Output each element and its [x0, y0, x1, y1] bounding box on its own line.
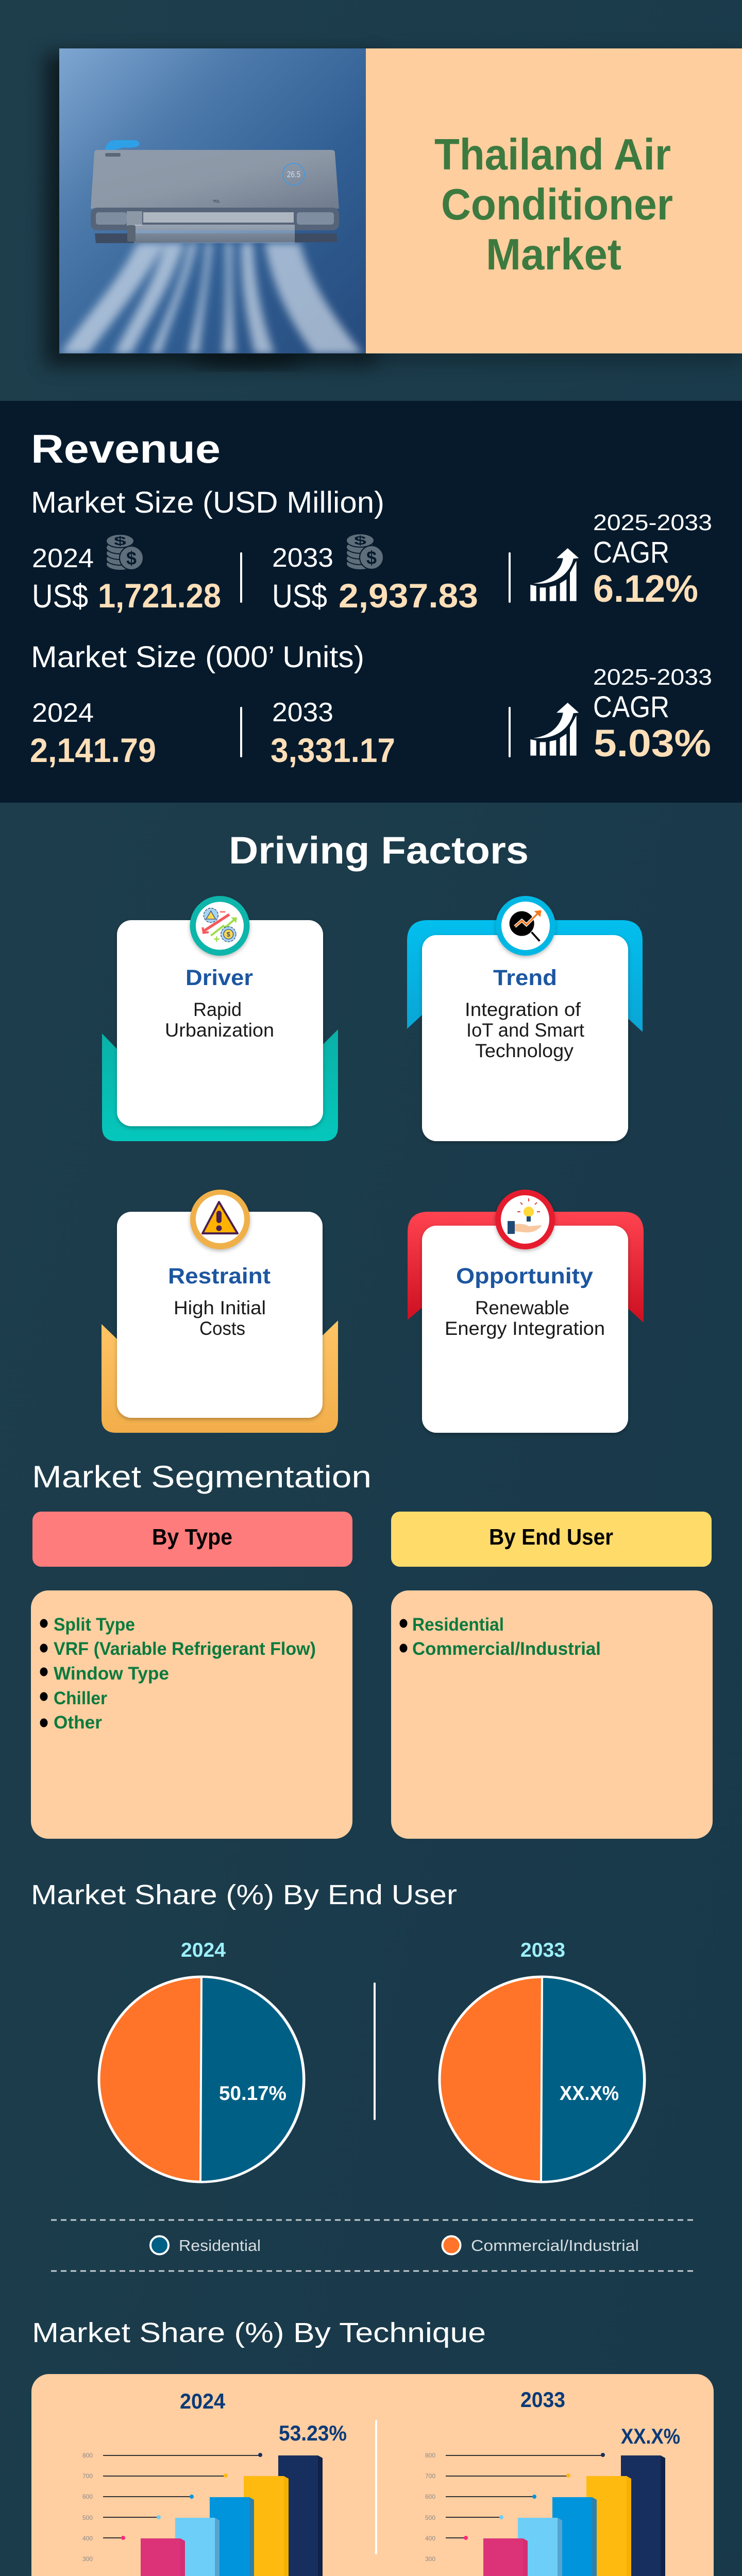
stat: 2024 value: 2024 — [32, 544, 94, 573]
heading: opportunity: Opportunity — [456, 1264, 593, 1289]
bar chart 2033: 700 — [425, 2472, 435, 2480]
panel: type list: Other — [54, 1713, 102, 1733]
stat: 2024 value: US$ — [32, 578, 88, 615]
stat: 2024 value — [32, 544, 221, 615]
title text — [435, 138, 672, 270]
bar chart 2024: 600 — [82, 2493, 93, 2500]
heading: driving factors: Driving Factors — [229, 829, 529, 872]
panel: end user list — [391, 1590, 713, 1839]
legend: end user: Residential — [179, 2236, 261, 2255]
heading: market share by technique: Market Share (%) By Technique — [32, 2317, 486, 2348]
bar chart 2033 — [425, 2452, 665, 2576]
header: by end user — [391, 1512, 712, 1567]
text: trend — [465, 999, 585, 1061]
text: market size USD: Market Size (USD Million) — [31, 486, 384, 519]
CAGR 2025-2033 units — [593, 665, 712, 765]
bar chart 2024 — [82, 2452, 323, 2576]
heading: driver: Driver — [185, 965, 253, 990]
panel: end user list: Commercial/Industrial — [412, 1639, 601, 1659]
CAGR 2025-2033 units: 5.03% — [594, 722, 711, 765]
text: trend: Technology — [475, 1040, 574, 1061]
stat: 2033 units: 2033 — [272, 698, 333, 727]
hero image: air conditioner — [59, 48, 366, 354]
title panel — [366, 48, 742, 353]
pie chart 2024: 50.17% — [219, 2082, 286, 2105]
text: market size units: Market Size (000’ Units) — [31, 640, 364, 674]
stat: 2024 units — [30, 698, 156, 769]
bar chart 2024: 800 — [82, 2452, 93, 2459]
legend: end user: Commercial/Industrial — [471, 2236, 639, 2255]
icon: coins 2033: $ — [354, 534, 367, 548]
icon: coins 2024: $ — [114, 534, 127, 548]
divider — [375, 2420, 377, 2554]
panel: revenue — [0, 401, 742, 803]
CAGR 2025-2033: CAGR — [593, 536, 669, 569]
panel: end user list: Residential — [412, 1615, 504, 1635]
year label 2033: 2033 — [520, 2387, 565, 2412]
value 2024: 53.23% — [279, 2421, 347, 2445]
icon: trend — [496, 896, 555, 956]
text: restraint — [174, 1297, 266, 1339]
bar chart 2033: 300 — [425, 2555, 435, 2563]
title text: Thailand Air — [434, 130, 671, 179]
text: driver — [165, 999, 274, 1041]
heading: trend: Trend — [493, 965, 557, 990]
CAGR 2025-2033 — [593, 510, 712, 610]
text: opportunity: Energy Integration — [445, 1318, 605, 1339]
pie chart 2024 — [99, 1977, 304, 2182]
heading: market segmentation: Market Segmentation — [32, 1460, 372, 1494]
year label 2024: 2024 — [180, 2389, 226, 2413]
hero image: air conditioner: TCL — [213, 200, 221, 204]
text: opportunity: Renewable — [475, 1297, 569, 1318]
heading: revenue: Revenue — [31, 426, 221, 471]
CAGR 2025-2033 units: 2025-2033 — [593, 665, 712, 690]
panel: type list: VRF (Variable Refrigerant Flow) — [54, 1639, 316, 1659]
icon: coins 2024 — [106, 534, 143, 570]
stat: 2024 value: 1,721.28 — [98, 577, 221, 615]
icon: driver: $ — [227, 931, 230, 938]
stat: 2024 units: 2024 — [32, 698, 94, 728]
panel: type list: Split Type — [54, 1615, 135, 1635]
CAGR 2025-2033: 2025-2033 — [593, 510, 712, 535]
pie chart 2033: XX.X% — [560, 2082, 619, 2105]
CAGR 2025-2033: 6.12% — [593, 567, 698, 610]
text: trend: IoT and Smart — [466, 1020, 585, 1041]
icon: opportunity — [495, 1190, 555, 1249]
stat: 2033 value — [272, 543, 478, 615]
legend: end user — [150, 2236, 639, 2255]
bar chart 2024: 500 — [82, 2514, 93, 2521]
title text: Conditioner — [441, 180, 673, 229]
year label 2024: 2024 — [181, 1939, 226, 1961]
bar chart 2033: 500 — [425, 2514, 435, 2521]
icon: restraint — [190, 1190, 250, 1249]
text: driver: Urbanization — [165, 1020, 274, 1041]
panel: opportunity — [408, 1190, 644, 1433]
hero banner — [45, 48, 742, 368]
text: opportunity — [445, 1297, 605, 1339]
icon: driver — [190, 896, 249, 956]
panel: restraint — [102, 1190, 338, 1433]
divider — [509, 552, 511, 603]
stat: 2033 value: 2033 — [272, 543, 333, 573]
hero image: air conditioner: 26.5 — [287, 170, 300, 179]
panel: technique charts — [31, 2374, 714, 2576]
title text: Market — [486, 230, 621, 279]
icon: coins 2033 — [346, 534, 383, 570]
heading: restraint: Restraint — [168, 1264, 271, 1289]
panel: type list: Chiller — [54, 1688, 107, 1708]
heading: market share by end user: Market Share (%) By End User — [31, 1879, 457, 1910]
bar chart 2033: 400 — [425, 2535, 435, 2542]
divider — [509, 707, 511, 757]
text: trend: Integration of — [465, 999, 581, 1020]
header: by end user: By End User — [489, 1524, 613, 1550]
icon: coins 2024: $ — [126, 548, 137, 569]
stat: 2033 value: US$ — [272, 578, 327, 615]
year label 2033: 2033 — [520, 1939, 565, 1961]
bar chart 2033: 800 — [425, 2452, 435, 2459]
stat: 2033 value: 2,937.83 — [339, 577, 478, 615]
divider — [240, 707, 242, 757]
icon: growth arrow — [530, 703, 579, 756]
pie chart 2033 — [440, 1977, 645, 2182]
bar chart 2033: 600 — [425, 2493, 435, 2500]
stat: 2033 units: 3,331.17 — [271, 731, 395, 769]
panel: type list — [31, 1590, 352, 1839]
text: driver: Rapid — [193, 999, 242, 1020]
CAGR 2025-2033 units: CAGR — [593, 690, 669, 724]
divider — [240, 552, 242, 603]
bar chart 2024: 300 — [82, 2555, 93, 2563]
panel: type list: Window Type — [54, 1664, 169, 1684]
panel: driver — [102, 896, 338, 1141]
panel: trend — [407, 896, 643, 1141]
bar chart 2024: 700 — [82, 2472, 93, 2480]
header: by type: By Type — [152, 1524, 232, 1550]
icon: growth arrow — [530, 548, 579, 601]
text: restraint: High Initial — [174, 1297, 266, 1318]
divider — [374, 1982, 376, 2120]
stat: 2024 units: 2,141.79 — [30, 731, 156, 769]
stat: 2033 units — [271, 698, 395, 769]
header: by type — [32, 1512, 352, 1567]
value 2033: XX.X% — [621, 2424, 680, 2448]
text: restraint: Costs — [199, 1318, 245, 1339]
bar chart 2024: 400 — [82, 2535, 93, 2542]
icon: coins 2033: $ — [366, 547, 377, 568]
